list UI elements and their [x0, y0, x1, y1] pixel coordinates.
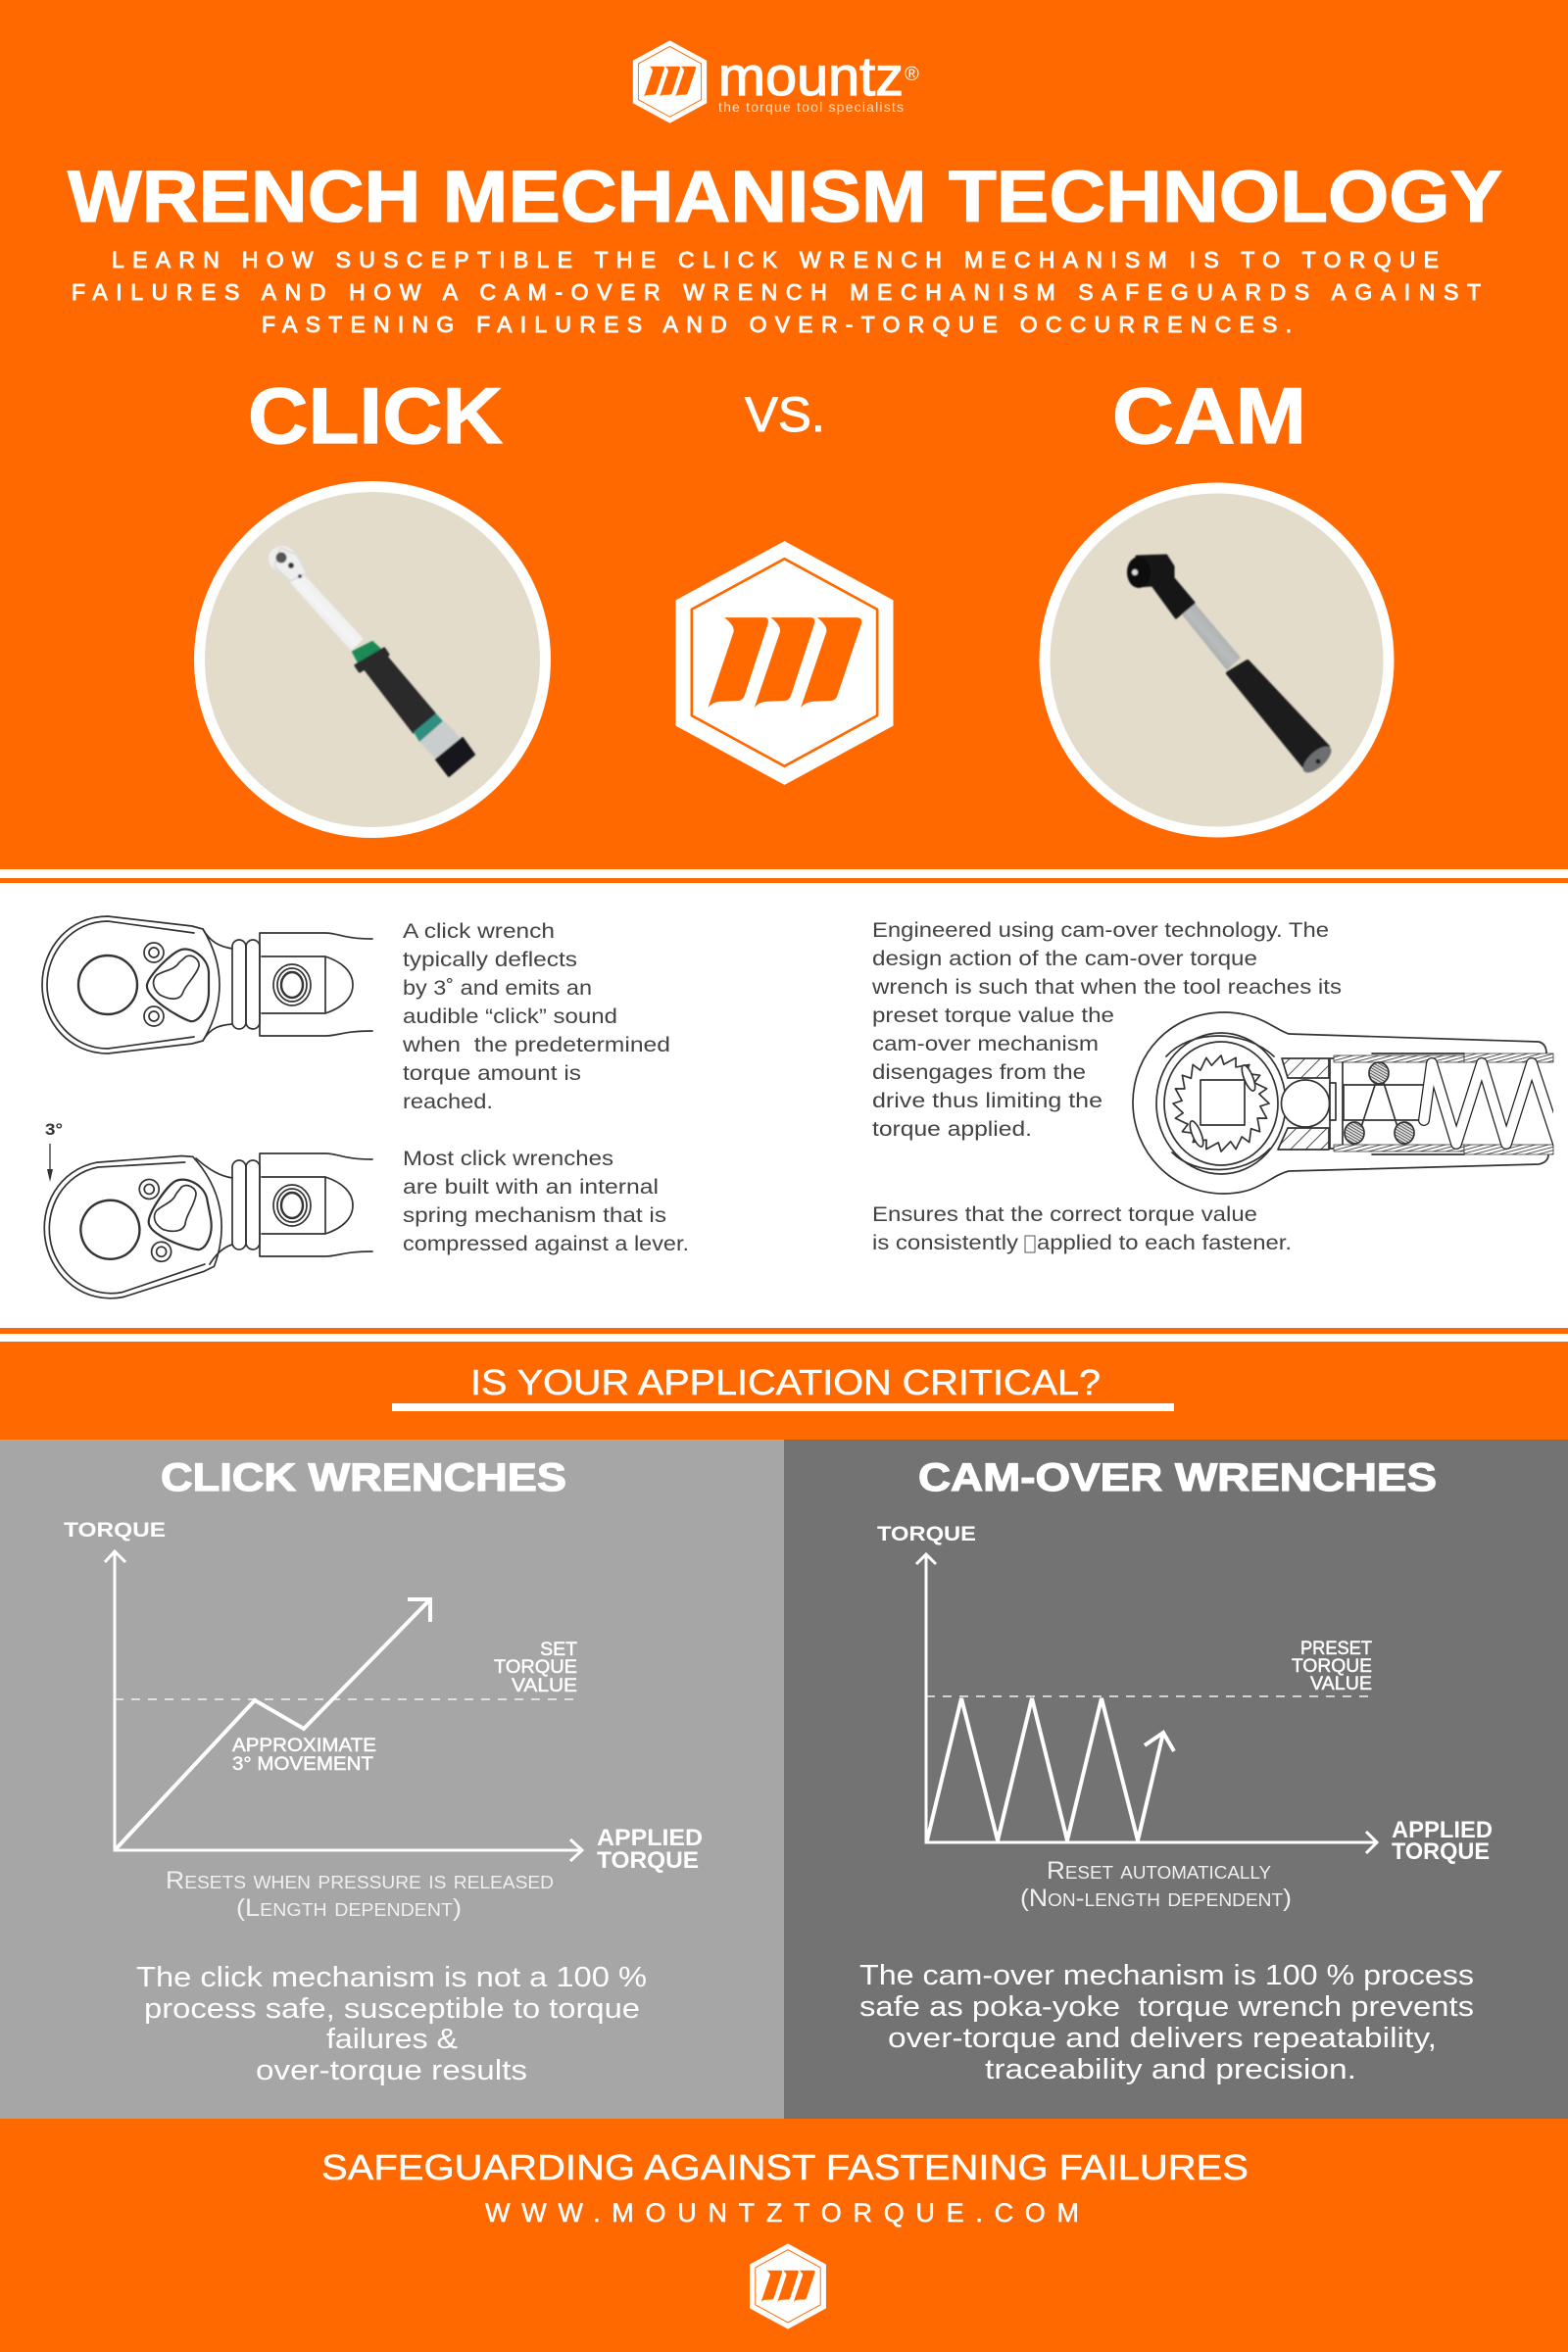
text block: click wrench spring: spring mechanism that is [403, 1203, 666, 1227]
chart caption: Resets when pressure is released [166, 1867, 554, 1894]
panel: white mechanism details [0, 869, 1568, 1342]
heading: CAM-OVER WRENCHES [918, 1456, 1437, 1499]
panel: cam-over wrenches [784, 1440, 1568, 2119]
tagline: SAFEGUARDING AGAINST FASTENING FAILURES [321, 2147, 1249, 2187]
icon: large hexagon logo [676, 542, 893, 784]
icon: hexagon logo mark [633, 41, 707, 122]
conclusion text [136, 1962, 647, 2086]
chart caption [166, 1867, 554, 1922]
conclusion text: over-torque results [256, 2055, 527, 2086]
text block: click wrench spring: compressed against a lever. [403, 1232, 689, 1255]
conclusion text: process safe, susceptible to torque [144, 1993, 640, 2025]
heading: CLICK WRENCHES [161, 1456, 566, 1499]
y axis label: TORQUE [64, 1519, 166, 1542]
text block: cam-over description: torque applied. [872, 1117, 1032, 1141]
wordmark: mountz [718, 45, 904, 107]
text block: cam-over consistency: applied to each fastener. [1037, 1231, 1292, 1254]
x axis label: TORQUE [597, 1847, 699, 1874]
text block: cam-over description: cam-over mechanism [872, 1032, 1099, 1055]
diagram: cam-over mechanism cross-section [1133, 1012, 1558, 1194]
text block: click wrench description [402, 919, 670, 1113]
text block: click wrench description: when the predetermined [402, 1033, 670, 1056]
conclusion text: The click mechanism is not a 100 % [136, 1962, 647, 1993]
chart: click torque curve [64, 1519, 703, 1874]
label: 3 degree deflection arrow: 3° [45, 1120, 63, 1139]
text block: click wrench description: audible “click” sound [403, 1004, 617, 1028]
title: WRENCH MECHANISM TECHNOLOGY [68, 156, 1502, 237]
panel: orange footer [0, 2119, 1568, 2352]
text block: click wrench description: typically deflects [403, 948, 577, 971]
movement annotation: 3° MOVEMENT [232, 1753, 373, 1775]
icon: cam-over wrench in circle [1045, 488, 1389, 832]
text block: cam-over description: wrench is such that when the tool reaches its [871, 975, 1342, 999]
heading: click: CLICK [248, 372, 503, 461]
brand logo [633, 41, 919, 122]
movement annotation: APPROXIMATE [232, 1735, 376, 1756]
x axis label [597, 1825, 703, 1874]
x axis label [1392, 1817, 1493, 1865]
y axis label: TORQUE [877, 1523, 976, 1545]
set torque value label: SET [540, 1639, 577, 1660]
preset torque value label: VALUE [1310, 1673, 1372, 1694]
icon: footer hexagon logo [750, 2244, 826, 2328]
text block: click wrench spring [403, 1147, 689, 1255]
x axis label: APPLIED [1392, 1817, 1493, 1843]
conclusion text: over-torque and delivers repeatability, [888, 2023, 1437, 2054]
chart caption: (Length dependent) [236, 1894, 462, 1922]
text block: cam-over description: disengages from the [872, 1060, 1086, 1084]
chart caption [1020, 1857, 1292, 1912]
set torque value label: VALUE [512, 1675, 577, 1696]
heading: vs: VS. [745, 387, 825, 442]
x axis label: APPLIED [597, 1825, 703, 1851]
diagram: click wrench at rest [42, 916, 372, 1054]
conclusion text: The cam-over mechanism is 100 % process [859, 1960, 1474, 1991]
heading underline [392, 1403, 1174, 1411]
text block: cam-over description [871, 918, 1342, 1141]
conclusion text: traceability and precision. [985, 2054, 1356, 2085]
heading: IS YOUR APPLICATION CRITICAL? [470, 1362, 1101, 1402]
text block: click wrench spring: are built with an internal [403, 1175, 659, 1199]
preset torque value label: PRESET [1300, 1638, 1372, 1659]
set torque value label [494, 1639, 577, 1696]
heading: cam: CAM [1112, 372, 1306, 461]
diagram: click wrench deflected 3 degrees [32, 1141, 372, 1309]
panel: orange header [0, 0, 1568, 869]
text block: click wrench spring: Most click wrenches [403, 1147, 613, 1170]
text block: cam-over consistency: is consistently [872, 1231, 1018, 1254]
chart caption: (Non-length dependent) [1020, 1885, 1292, 1912]
text block: click wrench description: torque amount is [403, 1061, 581, 1085]
preset torque value label [1292, 1638, 1372, 1694]
conclusion text: safe as poka-yoke torque wrench prevents [859, 1991, 1474, 2023]
panel: click wrenches [0, 1440, 784, 2119]
chart caption: Reset automatically [1047, 1857, 1271, 1885]
x axis label: TORQUE [1392, 1838, 1490, 1865]
panel: critical application banner [0, 1342, 1568, 1440]
icon: click wrench in circle [200, 486, 545, 833]
text block: cam-over description: Engineered using cam-over technology. The [872, 918, 1329, 942]
text block: click wrench description: A click wrench [403, 919, 555, 943]
text block: cam-over consistency [872, 1202, 1292, 1254]
text block: cam-over consistency: Ensures that the correct torque value [872, 1202, 1257, 1226]
conclusion text [859, 1960, 1474, 2085]
website: WWW.MOUNTZTORQUE.COM [485, 2198, 1079, 2228]
subtitle: LEARN HOW SUSCEPTIBLE THE CLICK WRENCH MECHANISM IS TO TORQUE [112, 247, 1439, 272]
registered mark: ® [905, 64, 919, 85]
movement annotation [232, 1735, 376, 1775]
subtitle: FASTENING FAILURES AND OVER-TORQUE OCCURRENCES. [262, 312, 1292, 337]
subtitle: FAILURES AND HOW A CAM-OVER WRENCH MECHANISM SAFEGUARDS AGAINST [72, 279, 1481, 305]
text block: cam-over description: drive thus limiting the [872, 1089, 1102, 1112]
tagline: the torque tool specialists [718, 99, 904, 115]
text block: cam-over description: preset torque value the [872, 1004, 1114, 1027]
text block: click wrench description: by 3˚ and emits an [403, 976, 592, 1000]
chart: cam-over torque curve [877, 1523, 1493, 1865]
text block: click wrench description: reached. [403, 1090, 493, 1113]
conclusion text: failures & [326, 2024, 458, 2055]
label: 3 degree deflection arrow [45, 1120, 63, 1182]
set torque value label: TORQUE [494, 1656, 577, 1678]
preset torque value label: TORQUE [1292, 1655, 1372, 1677]
subtitle [72, 247, 1481, 337]
text block: cam-over description: design action of the cam-over torque [872, 947, 1257, 970]
